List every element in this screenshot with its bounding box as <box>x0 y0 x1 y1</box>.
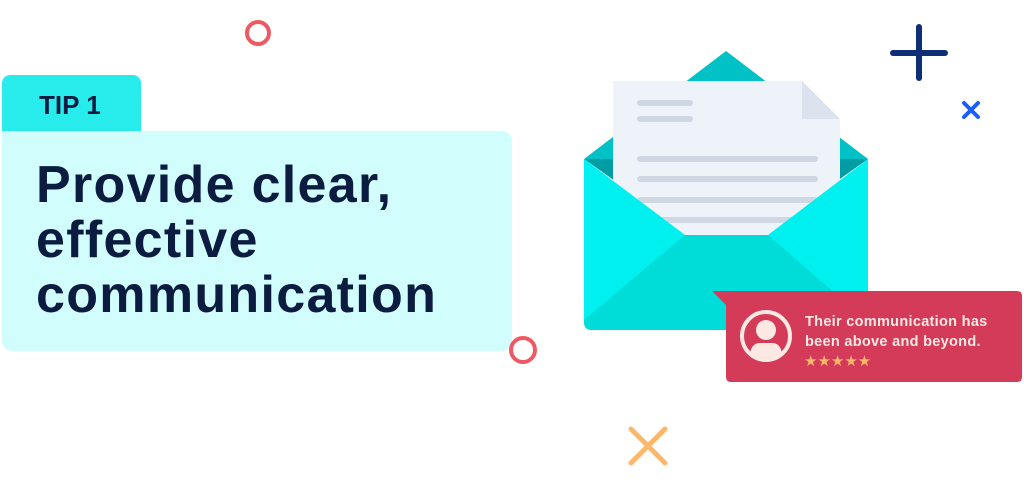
tab: TIP 1 <box>2 75 141 132</box>
icon: red circle top <box>247 22 269 44</box>
icon: orange x <box>631 429 665 463</box>
envelope <box>584 51 868 330</box>
stars: ★★★★★ <box>804 353 871 370</box>
panel: headline <box>2 131 512 351</box>
icon: blue x <box>964 103 978 117</box>
heading <box>36 156 437 324</box>
callout: review card <box>712 291 1022 382</box>
icon: red circle bottom <box>511 338 535 362</box>
heading: effective <box>36 211 259 269</box>
icon: navy plus <box>893 27 945 78</box>
icon: avatar <box>742 312 790 360</box>
heading: Provide clear, <box>36 156 392 214</box>
review text: Their communication has <box>805 314 988 330</box>
callout: review card: been above and beyond. <box>805 334 981 350</box>
heading: communication <box>36 266 437 324</box>
tab: TIP 1: TIP 1 <box>39 90 101 120</box>
letter <box>613 81 840 300</box>
